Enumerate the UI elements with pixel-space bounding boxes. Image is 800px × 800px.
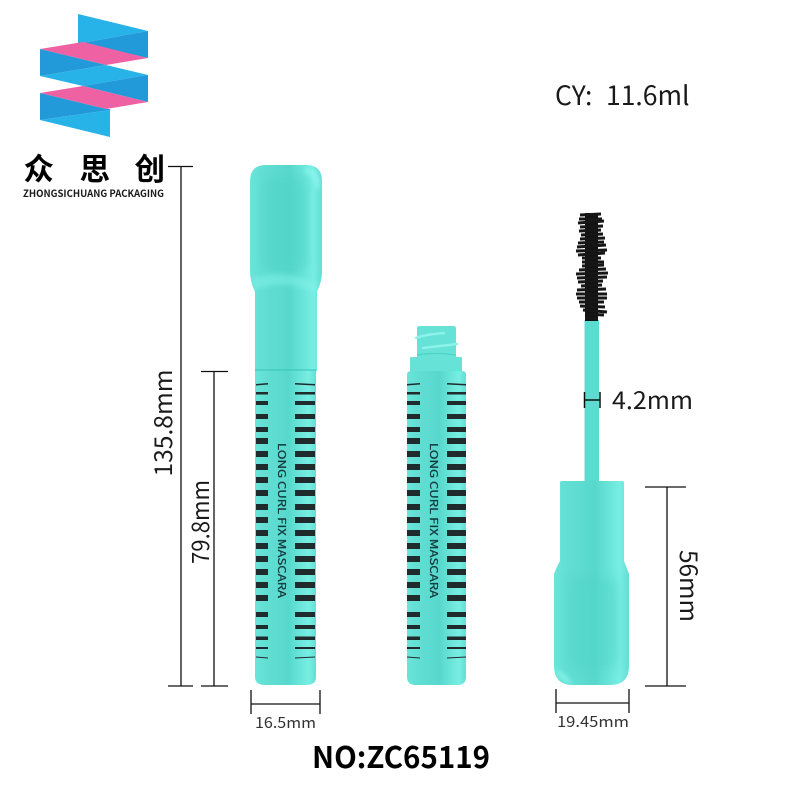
dimension: stem width 4.2mm: 4.2mm [612,381,693,416]
capacity label: CY: [555,74,592,113]
tube neck with threads [410,326,462,371]
open tube [407,326,466,685]
dimension: total height 135.8mm: 135.8mm [144,370,179,476]
open tube stripes [407,383,466,658]
brush [576,213,608,321]
open tube vertical label: LONG CURL FIX MASCARA [426,443,442,598]
closed cap [250,165,322,371]
dimension: body height 79.8mm [182,371,228,686]
wand stem [584,320,599,484]
logo chinese name 2: 思 [80,145,110,189]
open tube body [407,371,466,685]
dimension: cap width 19.45mm: 19.45mm [557,711,629,732]
dimension: tube width 16.5mm [251,690,320,733]
logo [23,14,165,200]
dimension: cap width 19.45mm [556,689,629,732]
logo chinese name: 众 [24,145,54,189]
capacity label: 11.6ml [606,74,690,113]
model number: NO:ZC65119 [312,733,490,777]
dimension: tube width 16.5mm: 16.5mm [255,712,316,733]
closed tube stripes [256,383,315,658]
applicator wand [554,213,629,685]
closed tube vertical label: LONG CURL FIX MASCARA [274,443,290,598]
closed tube body [255,370,316,685]
dimension: total height 135.8mm [144,166,193,686]
logo english name: ZHONGSICHUANG PACKAGING [23,186,164,200]
wand cap [554,481,629,685]
logo chinese name 3: 创 [134,145,165,189]
dimension: body height 79.8mm: 79.8mm [182,480,216,564]
logo mark [40,14,148,137]
dimension: cap height 56mm [645,487,708,686]
closed mascara tube [250,165,322,685]
dimension: cap height 56mm: 56mm [673,550,708,622]
